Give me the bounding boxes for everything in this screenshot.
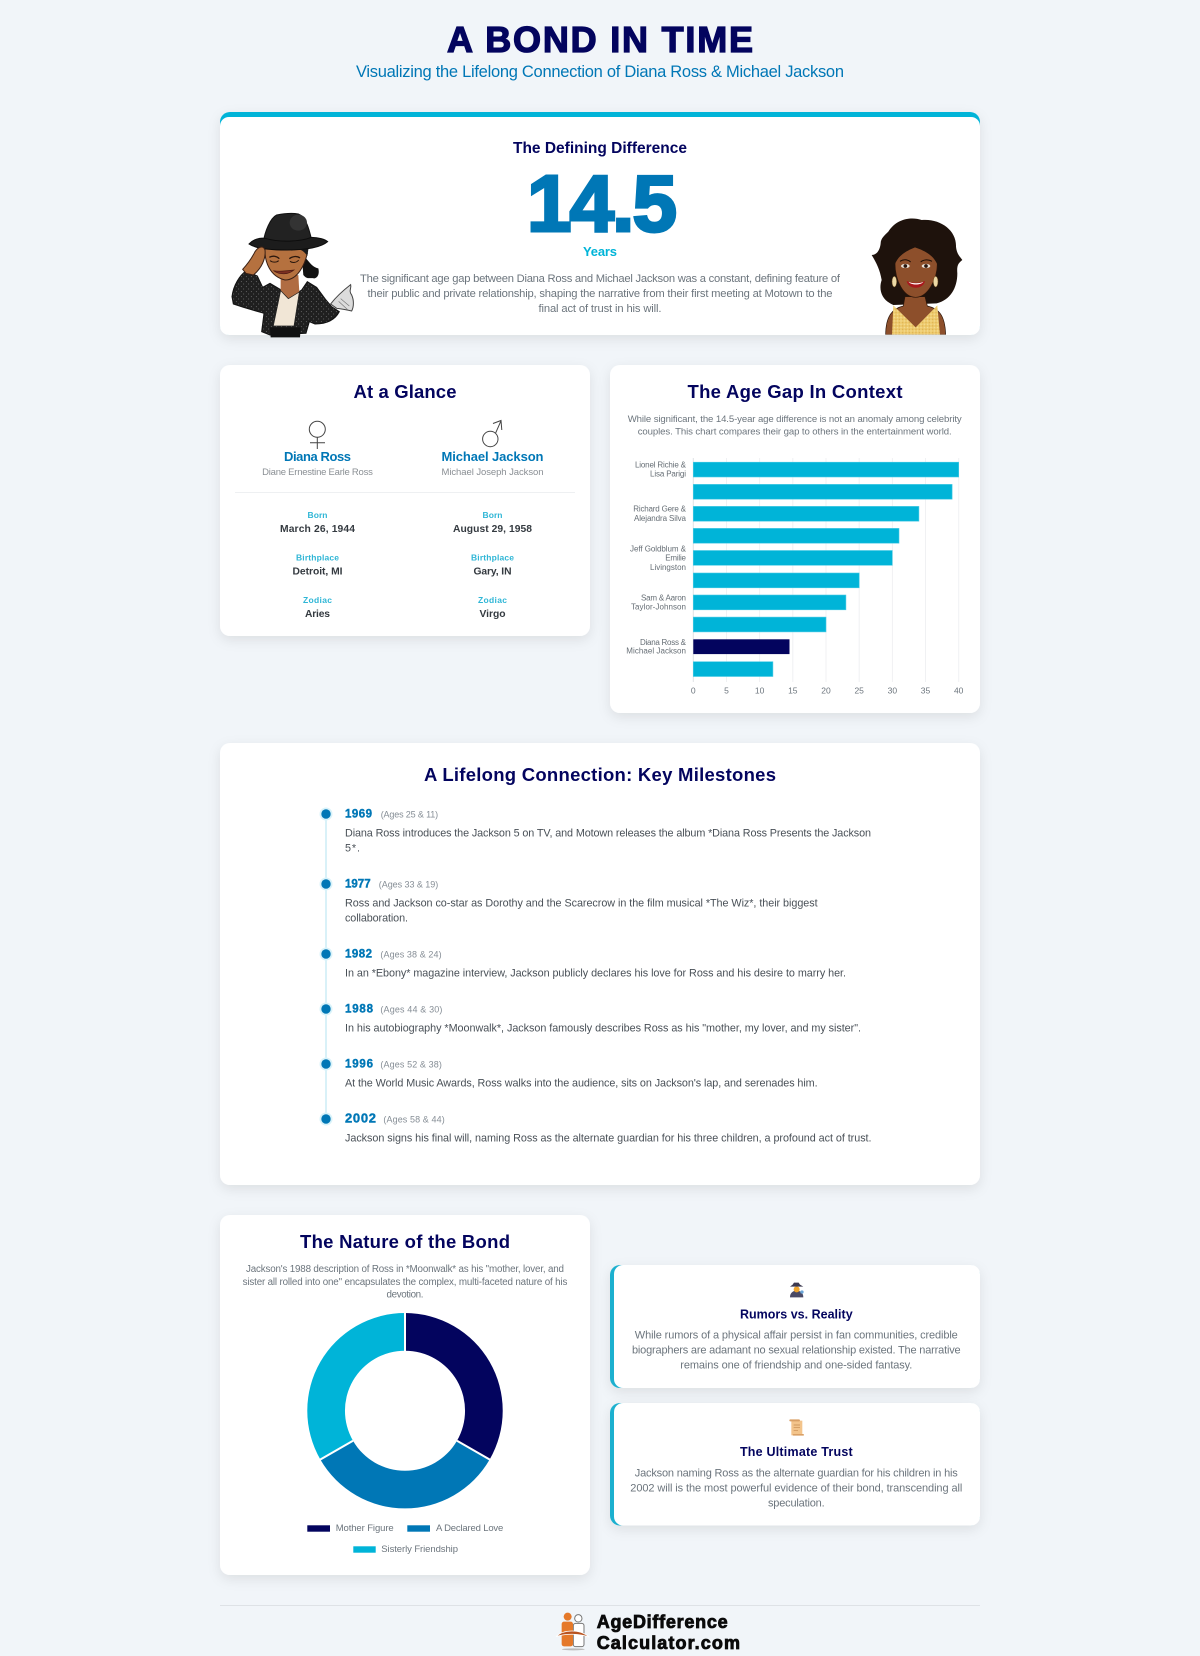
heading: nature of the bond: The Nature of the Bond — [300, 1231, 510, 1252]
chart category labels: Taylor-Johnson — [631, 602, 686, 611]
callout text: 2002 will is the most powerful evidence of their bond, transcending all — [630, 1482, 962, 1494]
chart category labels: Jeff Goldblum & — [630, 545, 687, 554]
profile: Michael Jackson: Michael Jackson — [442, 449, 544, 464]
milestone 1996 — [320, 1058, 818, 1089]
milestone 1988: 1988 — [345, 1004, 374, 1016]
chart axis ticks: 5 — [724, 685, 729, 695]
milestone 1996: (Ages 52 & 38) — [380, 1060, 442, 1070]
milestone 1977 — [320, 878, 818, 924]
milestone 2002: Jackson signs his final will, naming Ross as the alternate guardian for his three children, a profound act of trust. — [345, 1132, 872, 1144]
callout text — [632, 1330, 961, 1372]
donut legend — [307, 1523, 503, 1555]
chart axis ticks: 15 — [788, 685, 798, 695]
icon: logo figures — [556, 1613, 589, 1650]
milestone 1988: (Ages 44 & 30) — [380, 1005, 442, 1015]
chart axis ticks: 20 — [821, 685, 831, 695]
hero description: final act of trust in his will. — [538, 303, 662, 315]
illustration: Michael Jackson — [232, 213, 353, 337]
chart category labels: Michael Jackson — [626, 647, 686, 656]
panel: the defining difference — [220, 112, 980, 337]
milestone 1982 — [320, 948, 846, 979]
profile: Diana Ross: Diane Ernestine Earle Ross — [262, 467, 373, 478]
panel: at a glance — [220, 365, 590, 636]
callout: rumors vs reality — [610, 1265, 980, 1388]
chart category labels: Livingston — [650, 563, 686, 572]
nature description: sister all rolled into one" encapsulates the complex, multi-faceted nature of his — [243, 1277, 567, 1288]
panel: the nature of the bond — [220, 1215, 590, 1575]
profile: Michael Jackson: Virgo — [480, 609, 506, 620]
illustration: Diana Ross — [872, 219, 962, 335]
chart axis ticks: 30 — [888, 685, 897, 695]
logo wordmark: AgeDifference — [597, 1612, 728, 1632]
chart axis ticks: 25 — [854, 685, 864, 695]
donut legend: Mother Figure — [336, 1523, 394, 1534]
panel: the age gap in context — [610, 365, 980, 713]
profile: Diana Ross: Diana Ross — [284, 449, 351, 464]
milestone 1982: In an *Ebony* magazine interview, Jackson publicly declares his love for Ross and his desire to marry her. — [345, 967, 846, 979]
chart category labels: Richard Gere & — [633, 505, 687, 514]
nature description: devotion. — [386, 1289, 424, 1300]
chart category labels: Lionel Richie & — [635, 461, 687, 470]
milestone 1977: Ross and Jackson co-star as Dorothy and the Scarecrow in the film musical *The Wiz*, their biggest — [345, 897, 818, 909]
chart axis ticks — [691, 685, 964, 695]
icon: female symbol — [309, 421, 325, 449]
milestone 1996: At the World Music Awards, Ross walks into the audience, sits on Jackson's lap, and serenades him. — [345, 1077, 818, 1089]
milestone 1969: (Ages 25 & 11) — [381, 810, 438, 820]
callout text: speculation. — [768, 1497, 825, 1509]
title: A BOND IN TIME — [447, 19, 753, 60]
milestone 1977: collaboration. — [345, 912, 408, 924]
profile: Diana Ross: Aries — [305, 609, 330, 620]
milestone 1969: 5*. — [345, 842, 360, 854]
milestone 1988 — [320, 1002, 861, 1034]
heading: milestones: A Lifelong Connection: Key Milestones — [424, 764, 776, 785]
callout: the ultimate trust — [610, 1403, 980, 1526]
icon: male symbol — [483, 420, 502, 447]
milestone 1982: (Ages 38 & 24) — [380, 950, 442, 960]
icon: scroll — [789, 1419, 804, 1436]
chart category labels: Emilie — [665, 553, 687, 562]
donut legend: A Declared Love — [436, 1523, 503, 1534]
bar chart: age gaps — [626, 458, 964, 695]
chart category labels: Diana Ross & — [640, 638, 687, 647]
hero description — [360, 273, 841, 315]
chart category labels: Lisa Parigi — [650, 470, 686, 479]
profile: Michael Jackson: Michael Joseph Jackson — [442, 467, 544, 478]
chart axis ticks: 10 — [755, 685, 765, 695]
chart axis ticks: 35 — [921, 685, 930, 695]
profile: Diana Ross: Born — [308, 510, 328, 520]
heading: at a glance: At a Glance — [354, 381, 456, 402]
profile: Michael Jackson: Gary, IN — [474, 567, 512, 578]
milestone 1996: 1996 — [345, 1059, 373, 1071]
profile: Michael Jackson: Zodiac — [478, 595, 507, 605]
chart category labels — [626, 461, 687, 656]
age gap description — [628, 414, 962, 438]
profile: Michael Jackson: Born — [482, 510, 502, 520]
milestone 2002 — [320, 1111, 872, 1144]
milestone 1977: 1977 — [345, 879, 371, 891]
callout text: biographers are adamant no sexual relationship existed. The narrative — [632, 1345, 961, 1357]
subtitle: Visualizing the Lifelong Connection of Diana Ross & Michael Jackson — [356, 63, 844, 81]
chart category labels: Sam & Aaron — [641, 593, 686, 602]
chart axis ticks: 0 — [691, 685, 696, 695]
milestone 1988: In his autobiography *Moonwalk*, Jackson famously describes Ross as his "mother, my lover, and my sister". — [345, 1022, 861, 1034]
profile: Michael Jackson: August 29, 1958 — [453, 524, 532, 535]
callout heading: Rumors vs. Reality — [740, 1308, 853, 1322]
milestone 2002: (Ages 58 & 44) — [383, 1115, 445, 1125]
logo wordmark — [597, 1612, 740, 1653]
nature description: Jackson's 1988 description of Ross in *Moonwalk* as his "mother, lover, and — [246, 1264, 564, 1275]
callout text — [630, 1467, 962, 1509]
profile: Diana Ross: Birthplace — [296, 552, 339, 562]
donut legend: Sisterly Friendship — [381, 1544, 458, 1555]
callout text: Jackson naming Ross as the alternate guardian for his children in his — [635, 1467, 958, 1479]
hero description: their public and private relationship, shaping the narrative from their first meeting at Motown to the — [368, 288, 832, 300]
hero description: The significant age gap between Diana Ross and Michael Jackson was a constant, defining feature of — [360, 273, 841, 285]
big number: 14.5: 14.5 — [527, 159, 677, 248]
heading: age gap: The Age Gap In Context — [688, 381, 902, 402]
age gap description: While significant, the 14.5-year age difference is not an anomaly among celebrity — [628, 414, 962, 425]
profile: Diana Ross — [262, 449, 373, 620]
nature description — [243, 1264, 567, 1300]
callout text: remains one of friendship and one-sided fantasy. — [680, 1360, 912, 1372]
age gap description: couples. This chart compares their gap to others in the entertainment world. — [638, 427, 952, 438]
panel: key milestones — [220, 743, 980, 1185]
profile: Michael Jackson — [442, 449, 544, 620]
milestone 1969: Diana Ross introduces the Jackson 5 on TV, and Motown releases the album *Diana Ross Presents the Jackson — [345, 827, 871, 839]
milestone 1982: 1982 — [345, 949, 372, 961]
milestone 1969 — [320, 808, 871, 854]
donut chart — [307, 1312, 503, 1508]
chart axis ticks: 40 — [954, 685, 964, 695]
footer logo — [556, 1612, 740, 1653]
profile: Michael Jackson: Birthplace — [471, 552, 514, 562]
profile: Diana Ross: Detroit, MI — [292, 567, 343, 578]
profile: Diana Ross: March 26, 1944 — [280, 524, 355, 535]
heading: the defining difference: The Defining Difference — [513, 140, 687, 157]
milestone 2002: 2002 — [345, 1111, 376, 1126]
unit: years: Years — [583, 244, 617, 259]
logo wordmark: Calculator.com — [597, 1633, 740, 1653]
icon: detective — [790, 1283, 804, 1297]
milestone 1969: 1969 — [345, 809, 372, 821]
profile: Diana Ross: Zodiac — [303, 595, 332, 605]
milestone 1977: (Ages 33 & 19) — [379, 880, 438, 890]
callout text: While rumors of a physical affair persist in fan communities, credible — [635, 1330, 958, 1342]
chart category labels: Alejandra Silva — [634, 514, 687, 523]
callout heading: The Ultimate Trust — [740, 1445, 853, 1459]
